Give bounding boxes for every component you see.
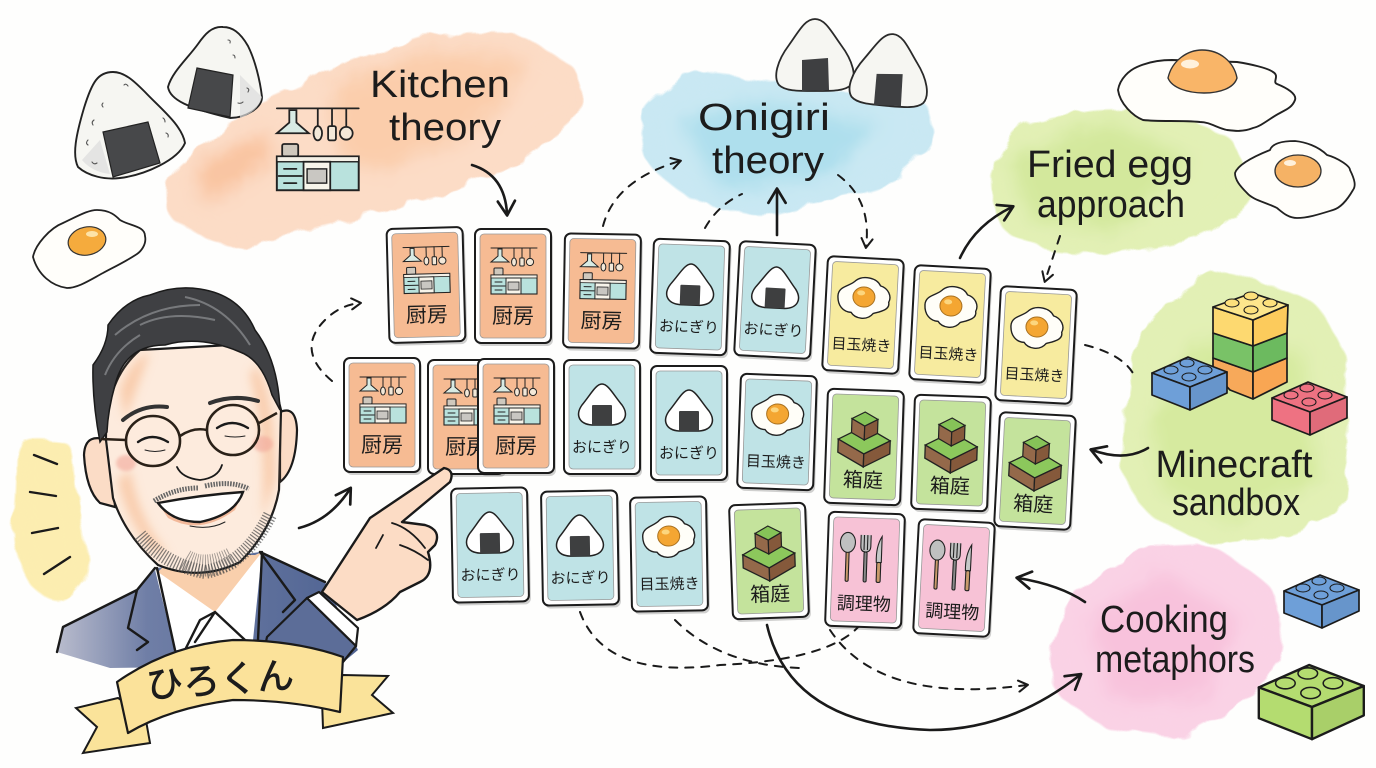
card grid — [344, 227, 1079, 640]
card おにぎり 5 — [451, 487, 531, 606]
card おにぎり 4 — [651, 366, 729, 483]
wash: fried egg approach — [988, 108, 1254, 254]
card おにぎり 3 — [564, 360, 642, 477]
heading: Onigiri theory: Onigiri — [698, 97, 830, 139]
wash: onigiri theory — [640, 72, 934, 218]
card 厨房 1: 厨房 — [405, 298, 448, 330]
moustache — [154, 484, 249, 501]
card 箱庭 2: 箱庭 — [929, 469, 970, 500]
heading: Fried egg approach: Fried egg — [1027, 144, 1193, 186]
card 目玉焼き 4: 目玉焼き — [746, 450, 806, 473]
card 厨房 5 — [428, 360, 506, 477]
wash: yellow glow — [12, 438, 90, 606]
card 調理物 1: 調理物 — [836, 589, 891, 617]
card 箱庭 1: 箱庭 — [842, 463, 883, 494]
yellow glow ticks — [30, 455, 70, 574]
card おにぎり 1: おにぎり — [659, 315, 719, 338]
card 厨房 3 — [563, 233, 643, 352]
icon: fried egg left — [33, 210, 145, 288]
icon: onigiri top pair right — [848, 31, 932, 109]
card 箱庭 1 — [824, 389, 906, 508]
heading: Kitchen theory: Kitchen — [370, 64, 510, 106]
heading: Cooking metaphors: metaphors — [1095, 639, 1255, 681]
card 厨房 4 — [344, 358, 422, 475]
sleeve and cuff — [262, 592, 358, 662]
card 厨房 6: 厨房 — [495, 430, 537, 460]
card 目玉焼き 2 — [909, 265, 993, 386]
card おにぎり 6: おにぎり — [550, 566, 611, 589]
card 厨房 3: 厨房 — [580, 305, 623, 335]
face — [106, 345, 281, 573]
face shading — [118, 352, 275, 555]
heading: Kitchen theory — [370, 64, 510, 149]
ears — [84, 410, 297, 507]
card おにぎり 5: おにぎり — [460, 563, 521, 586]
icon: onigiri large left — [75, 72, 185, 179]
card おにぎり 6 — [541, 490, 621, 609]
heading: Fried egg approach: approach — [1037, 184, 1185, 226]
heading: Minecraft sandbox — [1156, 444, 1313, 524]
glasses — [101, 405, 277, 466]
arrows — [299, 161, 1148, 730]
heading: Onigiri theory: theory — [712, 140, 824, 182]
card 箱庭 3 — [994, 412, 1078, 533]
card 目玉焼き 1: 目玉焼き — [831, 332, 892, 357]
banner: ひろくん — [76, 640, 393, 753]
heading: Onigiri theory — [698, 97, 830, 182]
heading: Fried egg approach — [1027, 144, 1193, 226]
icon: fried egg top right — [1118, 50, 1295, 131]
card 厨房 2: 厨房 — [492, 300, 534, 330]
heading: Minecraft sandbox: sandbox — [1172, 482, 1300, 524]
card 厨房 6 — [478, 359, 556, 476]
heading: Minecraft sandbox: Minecraft — [1156, 444, 1313, 486]
card 厨房 2 — [475, 229, 553, 346]
icon: lego red — [1272, 382, 1347, 435]
card おにぎり 2 — [734, 241, 818, 362]
card 目玉焼き 2: 目玉焼き — [918, 341, 979, 366]
card 箱庭 3: 箱庭 — [1013, 487, 1054, 518]
beard — [140, 515, 270, 572]
card 調理物 2 — [913, 519, 997, 640]
icon: onigiri upper left — [168, 27, 262, 118]
wash: minecraft sandbox — [1122, 268, 1350, 544]
hair — [93, 288, 280, 442]
card 目玉焼き 5 — [630, 496, 710, 615]
cheeks — [116, 436, 273, 471]
banner: ひろくん: ひろくん — [144, 645, 295, 709]
pointing hand — [322, 468, 452, 620]
icon: lego blue lower right — [1284, 575, 1359, 628]
card 調理物 2: 調理物 — [925, 597, 980, 625]
card 目玉焼き 4 — [737, 374, 819, 493]
wash: kitchen theory — [165, 34, 580, 248]
card 目玉焼き 5: 目玉焼き — [639, 572, 700, 595]
portrait: ひろくん — [57, 288, 452, 668]
card おにぎり 2: おにぎり — [743, 317, 804, 342]
card 箱庭 2 — [911, 395, 993, 514]
card 厨房 4: 厨房 — [361, 429, 403, 459]
jacket and shirt — [57, 552, 358, 668]
icon: kitchen illustration — [277, 108, 359, 190]
card おにぎり 4: おにぎり — [659, 442, 719, 463]
card おにぎり 3: おにぎり — [572, 436, 632, 457]
card 厨房 1 — [387, 227, 468, 346]
heading: Cooking metaphors: Cooking — [1100, 599, 1228, 641]
card 目玉焼き 3 — [995, 286, 1079, 407]
card おにぎり 1 — [650, 239, 732, 358]
card 調理物 1 — [825, 512, 907, 631]
card 厨房 5: 厨房 — [445, 431, 487, 461]
icon: lego blue — [1152, 357, 1227, 410]
heading: Kitchen theory: theory — [389, 107, 501, 149]
card 箱庭 4: 箱庭 — [750, 577, 791, 608]
nose — [177, 465, 222, 480]
icon: onigiri top pair left — [776, 19, 854, 91]
card 目玉焼き 3: 目玉焼き — [1004, 362, 1065, 387]
heading: Cooking metaphors — [1095, 599, 1255, 681]
icon: fried egg right — [1235, 141, 1355, 218]
icon: lego green lower right — [1259, 665, 1364, 739]
brows and eyes — [123, 398, 258, 452]
icon: lego stack — [1213, 292, 1288, 399]
card 目玉焼き 1 — [822, 256, 906, 377]
wash: cooking metaphors — [1050, 544, 1286, 739]
card 箱庭 4 — [729, 503, 811, 622]
mouth — [158, 492, 243, 527]
